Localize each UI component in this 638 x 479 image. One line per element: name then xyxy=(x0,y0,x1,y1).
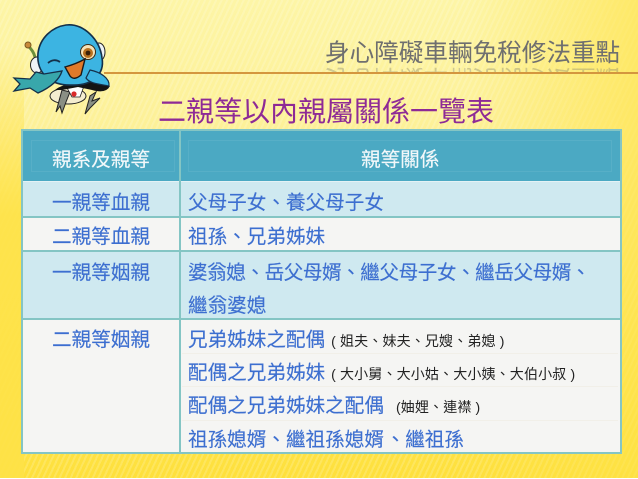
icon: blue bird mascot xyxy=(12,24,110,114)
row: first degree blood xyxy=(23,181,620,216)
header: kinship relation: 親等關係 xyxy=(361,149,439,171)
content: 父母子女、養父母子女 xyxy=(188,192,384,214)
content line 3: 配偶之兄弟姊妹之配偶 (妯娌、連襟 ) xyxy=(188,395,480,417)
row: second degree blood xyxy=(23,216,620,251)
heading: slide topic: 身心障礙車輛免稅修法重點 xyxy=(325,40,620,67)
title: 二親等以內親屬關係一覽表 xyxy=(158,96,494,127)
label: 一親等血親 xyxy=(52,192,150,214)
content line 1: 婆翁媳、岳父母婿、繼父母子女、繼岳父母婿、 xyxy=(188,262,590,284)
header: relation and degree: 親系及親等 xyxy=(52,149,150,171)
content line 2: 配偶之兄弟姊妹 ( 大小舅、大小姑、大小姨、大伯小叔 ) xyxy=(188,362,575,384)
label: 二親等血親 xyxy=(52,226,150,248)
content line 1: 兄弟姊妹之配偶 ( 姐夫、妹夫、兄嫂、弟媳 ) xyxy=(188,329,505,351)
row: first degree in-law xyxy=(23,250,620,318)
content line 2: 繼翁婆媳 xyxy=(188,295,266,317)
label: 一親等姻親 xyxy=(52,262,150,284)
content line 4: 祖孫媳婿、繼祖孫媳婿 、繼祖孫 xyxy=(188,429,464,451)
label: 二親等姻親 xyxy=(52,329,150,351)
table: kinship degrees xyxy=(21,129,622,454)
orange rule under heading xyxy=(104,72,638,74)
content: 祖孫、兄弟姊妹 xyxy=(188,226,325,248)
table header row xyxy=(23,131,620,181)
row: second degree in-law xyxy=(23,318,620,452)
